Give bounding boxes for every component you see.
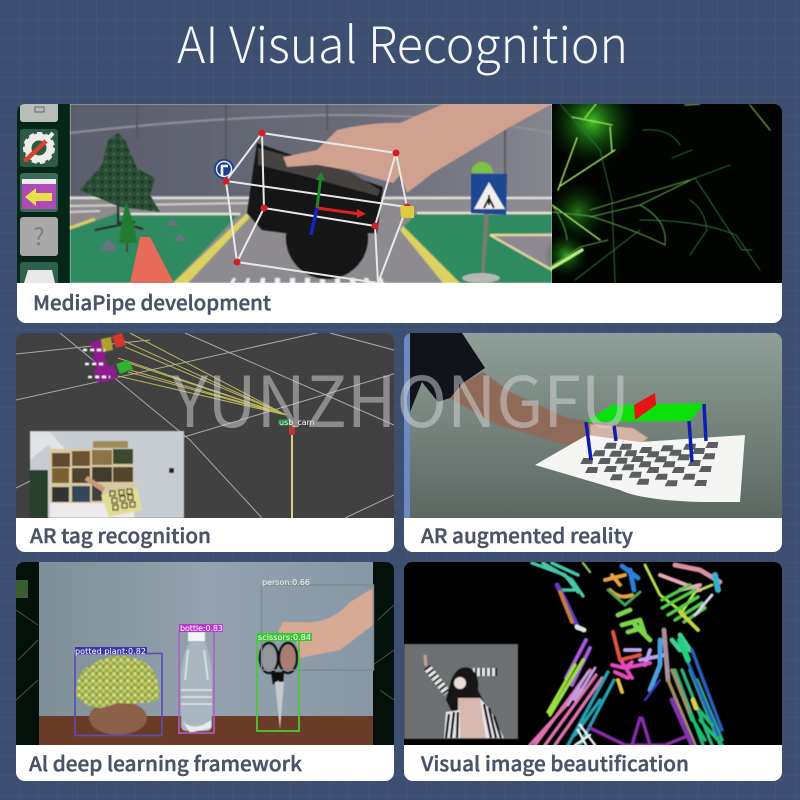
panel: MediaPipe development bbox=[17, 104, 782, 323]
label: AI deep learning framework: Al deep learning framework bbox=[29, 748, 303, 777]
hand bbox=[283, 104, 552, 193]
label: AR tag recognition: AR tag recognition bbox=[30, 520, 211, 549]
detection box: scissors: scissors:0.84 bbox=[258, 633, 311, 642]
panel: Visual image beautification bbox=[404, 562, 782, 781]
panel: AR augmented reality bbox=[404, 333, 782, 552]
icon: crossing sign bbox=[462, 162, 507, 283]
hand bbox=[278, 588, 373, 658]
arm bbox=[450, 372, 648, 445]
label: Visual image beautification: Visual image beautification bbox=[420, 748, 689, 777]
label: AR augmented reality: AR augmented reality bbox=[421, 520, 633, 549]
detection box: potted plant: potted plant:0.82 bbox=[75, 647, 146, 656]
icon: side toolbar buttons bbox=[20, 100, 58, 286]
rocks bbox=[100, 219, 187, 252]
image: AR tag visualisation bbox=[16, 330, 400, 518]
panel: AI deep learning framework bbox=[16, 562, 394, 781]
road scene bbox=[70, 104, 552, 283]
neon figure strokes bbox=[530, 563, 722, 745]
AR tag markers bbox=[83, 333, 133, 383]
label: MediaPipe development: MediaPipe development bbox=[33, 287, 271, 316]
3D bounding box bbox=[222, 130, 410, 283]
detection box: bottle bbox=[179, 624, 223, 733]
checker squares bbox=[580, 442, 718, 486]
camera bbox=[247, 143, 383, 279]
hand highlight bbox=[590, 424, 648, 444]
icon: blue turn sign bbox=[214, 159, 234, 179]
image: AR table on checkerboard bbox=[404, 333, 782, 518]
checkerboard paper bbox=[535, 435, 745, 502]
object: scissors bbox=[260, 643, 297, 730]
detection box: person bbox=[262, 578, 374, 670]
camera link marker bbox=[278, 418, 315, 518]
image: object detection bbox=[16, 562, 394, 745]
object: potted plant bbox=[76, 656, 159, 735]
laser light panel bbox=[546, 104, 782, 283]
icon: pine tree bbox=[80, 133, 160, 252]
detection box: bottle: bottle:0.83 bbox=[180, 624, 223, 633]
title: AI Visual Recognition bbox=[177, 6, 628, 78]
AR table bbox=[585, 393, 706, 462]
detection box: potted plant bbox=[75, 647, 162, 736]
inset: photo of dancing person bbox=[404, 644, 518, 739]
image: camera tracked in 3D on a model road scene bbox=[17, 104, 782, 283]
panel: AR tag recognition bbox=[16, 330, 400, 552]
detection box: person: person:0.66 bbox=[262, 578, 310, 587]
watermark: YUNZHONGFU bbox=[171, 347, 630, 448]
inset: camera view bbox=[30, 431, 184, 518]
yellow toy bbox=[400, 206, 414, 218]
camera link marker: usb_cam bbox=[279, 418, 315, 427]
detection box: scissors bbox=[257, 633, 312, 731]
icon: side toolbar buttons: ? bbox=[33, 217, 45, 252]
sleeve bbox=[410, 333, 485, 412]
object: water bottle bbox=[181, 632, 212, 733]
tag link lines bbox=[118, 333, 286, 415]
image: neon outline body effect bbox=[404, 562, 782, 745]
icon: traffic cone bbox=[130, 237, 174, 283]
